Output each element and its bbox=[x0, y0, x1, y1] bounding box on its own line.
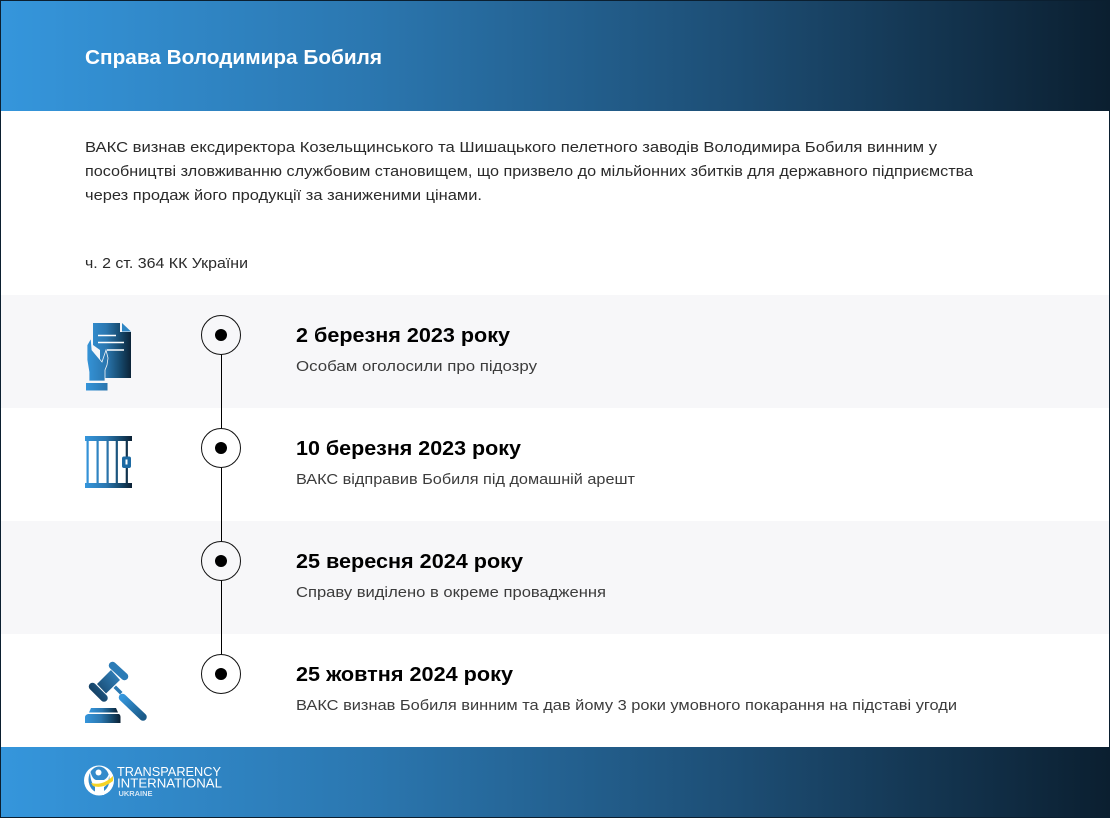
icon: hand holding document bbox=[86, 323, 131, 390]
logo: Transparency International Ukraine: TRANSPARENCY bbox=[117, 764, 221, 779]
icon: prison bars bbox=[85, 436, 132, 488]
event 1 bbox=[296, 324, 538, 375]
timeline marker 1 bbox=[202, 316, 240, 354]
logo: Transparency International Ukraine: UKRAINE bbox=[118, 789, 152, 798]
event 3: Справу виділено в окреме провадження bbox=[296, 584, 606, 601]
icon: judge gavel bbox=[85, 666, 143, 723]
footer banner bbox=[1, 747, 1109, 817]
intro text: ВАКС визнав ексдиректора Козельщинського та Шишацького пелетного заводів Володимира Бобиля винним у bbox=[85, 139, 938, 156]
event 2: 10 березня 2023 року bbox=[296, 437, 522, 460]
row background: 25 вересня 2024 bbox=[1, 521, 1109, 634]
row background: 2 березня 2023 bbox=[1, 295, 1109, 408]
intro text: через продаж його продукції за заниженими цінами. bbox=[85, 187, 482, 204]
event 2 bbox=[296, 437, 635, 488]
timeline line bbox=[220, 334, 222, 674]
event 2: ВАКС відправив Бобиля під домашній арешт bbox=[296, 471, 635, 488]
event 3 bbox=[296, 550, 606, 601]
event 4: 25 жовтня 2024 року bbox=[296, 663, 514, 686]
timeline marker 4 bbox=[202, 654, 240, 694]
event 1: 2 березня 2023 року bbox=[296, 324, 511, 347]
timeline marker 3 bbox=[202, 542, 240, 580]
intro text bbox=[85, 139, 974, 204]
legal article reference: ч. 2 ст. 364 КК України bbox=[85, 255, 248, 272]
event 1: Особам оголосили про підозру bbox=[296, 358, 538, 375]
timeline marker 2 bbox=[202, 428, 240, 468]
event 4: ВАКС визнав Бобиля винним та дав йому 3 роки умовного покарання на підставі угоди bbox=[296, 697, 957, 714]
logo: Transparency International Ukraine: INTERNATIONAL bbox=[117, 776, 222, 790]
event 3: 25 вересня 2024 року bbox=[296, 550, 524, 573]
logo: Transparency International Ukraine bbox=[84, 764, 222, 798]
title: Справа Володимира Бобиля bbox=[85, 46, 382, 69]
header banner bbox=[1, 1, 1109, 111]
event 4 bbox=[296, 663, 957, 714]
intro text: пособництві зловживанню службовим становищем, що призвело до мільйонних збитків для державного підприємства bbox=[85, 163, 974, 180]
